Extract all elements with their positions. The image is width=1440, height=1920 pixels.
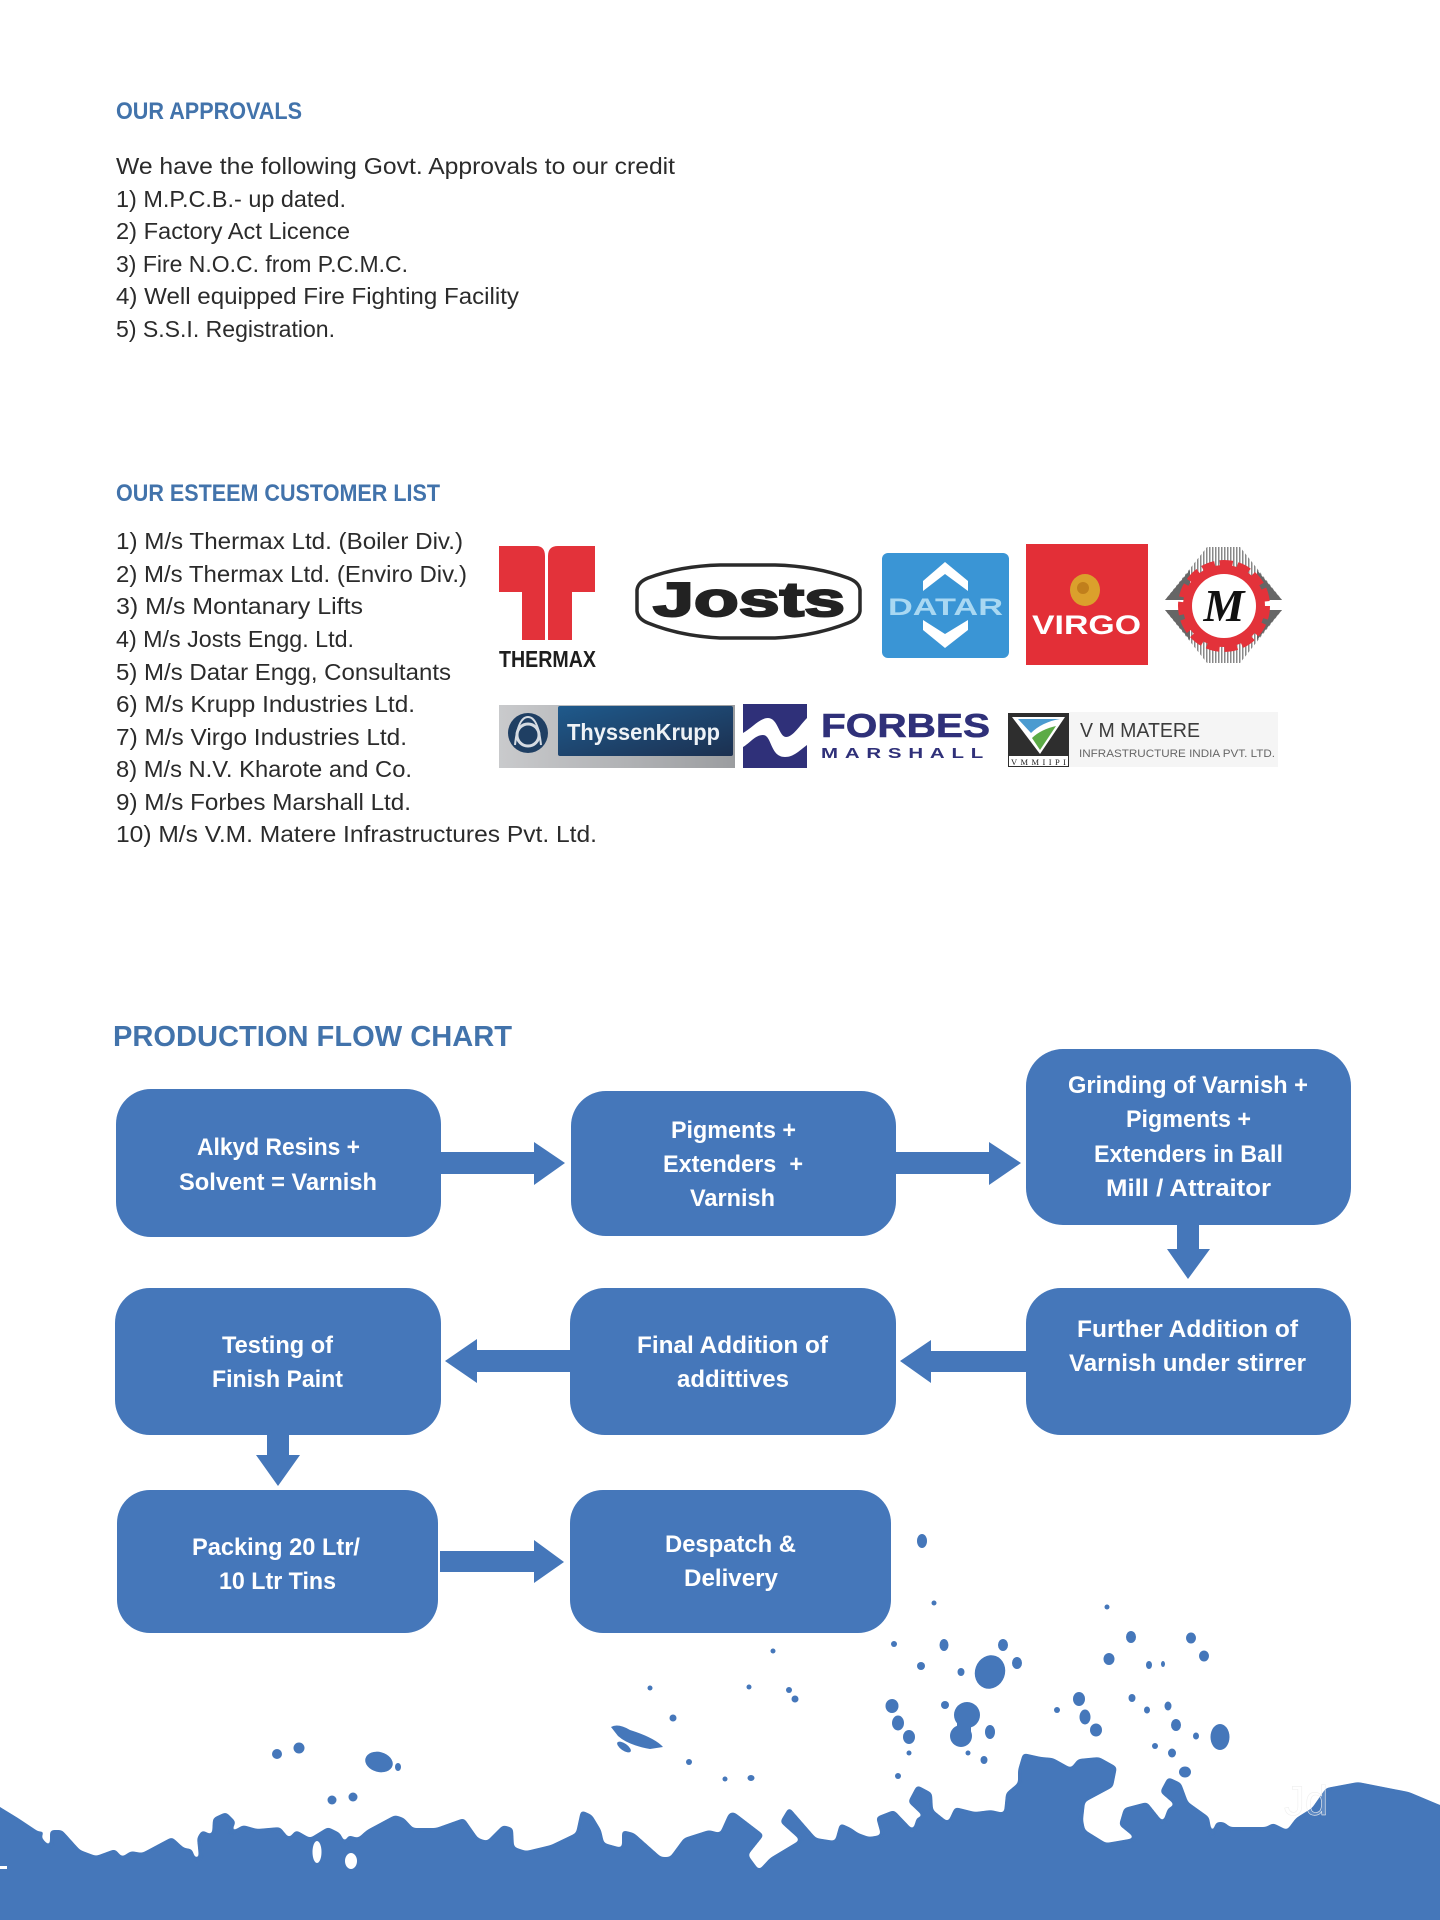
text block: approvals list (116, 153, 676, 342)
text block: approvals list: 4) Well equipped Fire Fighting Facility (116, 283, 520, 309)
step: packing (117, 1490, 438, 1633)
watermark: Jd (1284, 1777, 1328, 1824)
arrow: step 7 to 8 (440, 1540, 564, 1583)
step: testing: Finish Paint (212, 1366, 343, 1393)
step: alkyd resins: Alkyd Resins + (197, 1134, 360, 1161)
step: grinding: Extenders in Ball (1094, 1141, 1283, 1168)
text block: customers: 9) M/s Forbes Marshall Ltd. (116, 789, 411, 815)
arrow: step 5 to 6 (445, 1339, 570, 1383)
text block: customers: 6) M/s Krupp Industries Ltd. (116, 691, 415, 717)
arrow: step 2 to 3 (896, 1142, 1021, 1185)
step: grinding: Grinding of Varnish + (1068, 1072, 1308, 1099)
logo: ThyssenKrupp (499, 705, 735, 768)
decoration: blue paint splash (0, 1534, 1440, 1920)
text block: customers: 4) M/s Josts Engg. Ltd. (116, 626, 354, 652)
step: pigments (571, 1091, 896, 1236)
text block: approvals list: We have the following Govt. Approvals to our credit (116, 153, 676, 179)
step: grinding (1026, 1049, 1351, 1225)
text block: approvals list: 1) M.P.C.B.- up dated. (116, 186, 346, 212)
logo: Virgo: VIRGO (1032, 610, 1141, 640)
text block: customers: 3) M/s Montanary Lifts (116, 593, 363, 619)
text block: customers: 2) M/s Thermax Ltd. (Enviro Div.) (116, 561, 467, 587)
step: despatch: Despatch & (665, 1531, 796, 1558)
step: pigments: Varnish (690, 1185, 775, 1212)
step: despatch (570, 1490, 891, 1633)
logo: Virgo (1026, 544, 1148, 665)
logo: Thermax: THERMAX (499, 646, 597, 672)
logo: VM Matere (1008, 712, 1278, 767)
text block: customers: 8) M/s N.V. Kharote and Co. (116, 756, 412, 782)
step: final addition: Final Addition of (637, 1332, 829, 1359)
text block: approvals list: 5) S.S.I. Registration. (116, 316, 335, 342)
text block: approvals list: 2) Factory Act Licence (116, 218, 350, 244)
step: packing: 10 Ltr Tins (219, 1568, 336, 1595)
logo: ThyssenKrupp: ThyssenKrupp (567, 719, 720, 745)
text block: approvals list: 3) Fire N.O.C. from P.C.M.C. (116, 251, 408, 277)
arrow: step 4 to 5 (900, 1340, 1026, 1383)
logo: VM Matere: V M MATERE (1080, 720, 1200, 742)
step: final addition: addittives (677, 1366, 789, 1393)
panel: customer list (116, 480, 1282, 847)
arrow: step 3 to 4 (1167, 1225, 1210, 1279)
step: further addition: Further Addition of (1077, 1316, 1299, 1343)
logo: Josts: Josts (653, 574, 845, 627)
text block: customers: 5) M/s Datar Engg, Consultants (116, 659, 451, 685)
logo: M emblem (1165, 547, 1282, 663)
heading: customer list: OUR ESTEEM CUSTOMER LIST (116, 480, 440, 507)
heading: production flow chart: PRODUCTION FLOW CHART (113, 1021, 512, 1053)
panel: production flow chart (113, 1021, 1351, 1633)
step: pigments: Extenders + (663, 1151, 803, 1178)
step: testing (115, 1288, 441, 1435)
logo: Thermax (499, 546, 597, 672)
step: grinding: Pigments + (1126, 1106, 1251, 1133)
arrow: step 6 to 7 (256, 1435, 300, 1486)
text block: customers (116, 528, 597, 847)
logo: Datar: DATAR (888, 594, 1003, 621)
logo: Forbes Marshall (743, 704, 990, 768)
heading: our approvals: OUR APPROVALS (116, 98, 302, 125)
step: further addition: Varnish under stirrer (1069, 1350, 1306, 1377)
step: alkyd resins: Solvent = Varnish (179, 1169, 377, 1196)
logo: Forbes Marshall: MARSHALL (821, 745, 990, 762)
logo: Forbes Marshall: FORBES (821, 707, 990, 744)
logo: VM Matere: INFRASTRUCTURE INDIA PVT. LTD. (1079, 748, 1275, 760)
step: further addition (1026, 1288, 1351, 1435)
text block: customers: 1) M/s Thermax Ltd. (Boiler Div.) (116, 528, 463, 554)
text block: customers: 7) M/s Virgo Industries Ltd. (116, 724, 407, 750)
step: pigments: Pigments + (671, 1117, 796, 1144)
logo: VM Matere: VMMIIPI (1011, 757, 1066, 767)
arrow: step 1 to 2 (441, 1142, 565, 1185)
logo: M emblem: M (1203, 580, 1247, 631)
step: grinding: Mill / Attraitor (1106, 1175, 1271, 1202)
step: testing: Testing of (222, 1332, 334, 1359)
step: packing: Packing 20 Ltr/ (192, 1534, 360, 1561)
step: despatch: Delivery (684, 1565, 779, 1592)
text block: customers: 10) M/s V.M. Matere Infrastructures Pvt. Ltd. (116, 821, 597, 847)
panel: our approvals (116, 98, 676, 342)
logo: Datar (882, 553, 1009, 658)
logo: Josts (637, 565, 860, 638)
step: final addition (570, 1288, 896, 1435)
step: alkyd resins (116, 1089, 441, 1237)
